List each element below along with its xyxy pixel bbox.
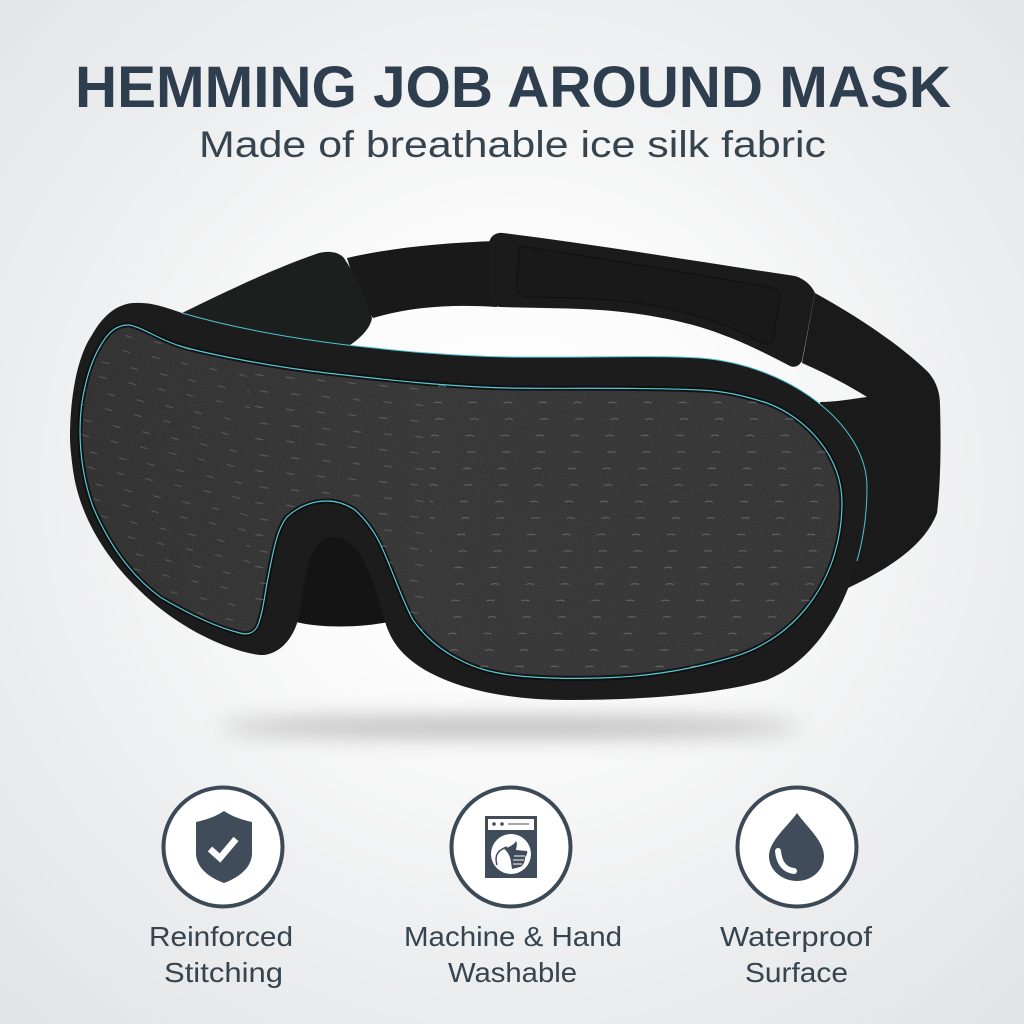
right strap — [802, 293, 941, 588]
feature: reinforced stitching — [149, 788, 293, 988]
label: Reinforced — [149, 921, 293, 952]
feature: waterproof surface: Surface — [745, 957, 848, 988]
left strap tab — [182, 252, 372, 347]
icon: washing machine with hand — [452, 788, 570, 906]
icon: shield with check — [164, 788, 282, 906]
nose bridge insert — [296, 530, 388, 626]
icon: water drop — [738, 788, 856, 906]
feature: reinforced stitching: Stitching — [164, 957, 283, 988]
label: Waterproof — [720, 921, 872, 952]
floor shadow — [220, 717, 800, 737]
feature: machine and hand washable — [404, 788, 622, 988]
rim top seam highlight — [182, 313, 867, 561]
feature: machine and hand washable: Washable — [448, 957, 577, 988]
subtitle: Made of breathable ice silk fabric — [199, 124, 826, 165]
sleep mask product — [60, 233, 941, 700]
mask outer rim — [70, 303, 867, 700]
adjustment pad — [489, 233, 815, 367]
title: HEMMING JOB AROUND MASK — [75, 55, 951, 120]
fabric panel — [78, 322, 844, 681]
label: Machine & Hand — [404, 921, 622, 952]
rear strap — [347, 241, 497, 318]
feature: waterproof surface — [720, 788, 872, 988]
